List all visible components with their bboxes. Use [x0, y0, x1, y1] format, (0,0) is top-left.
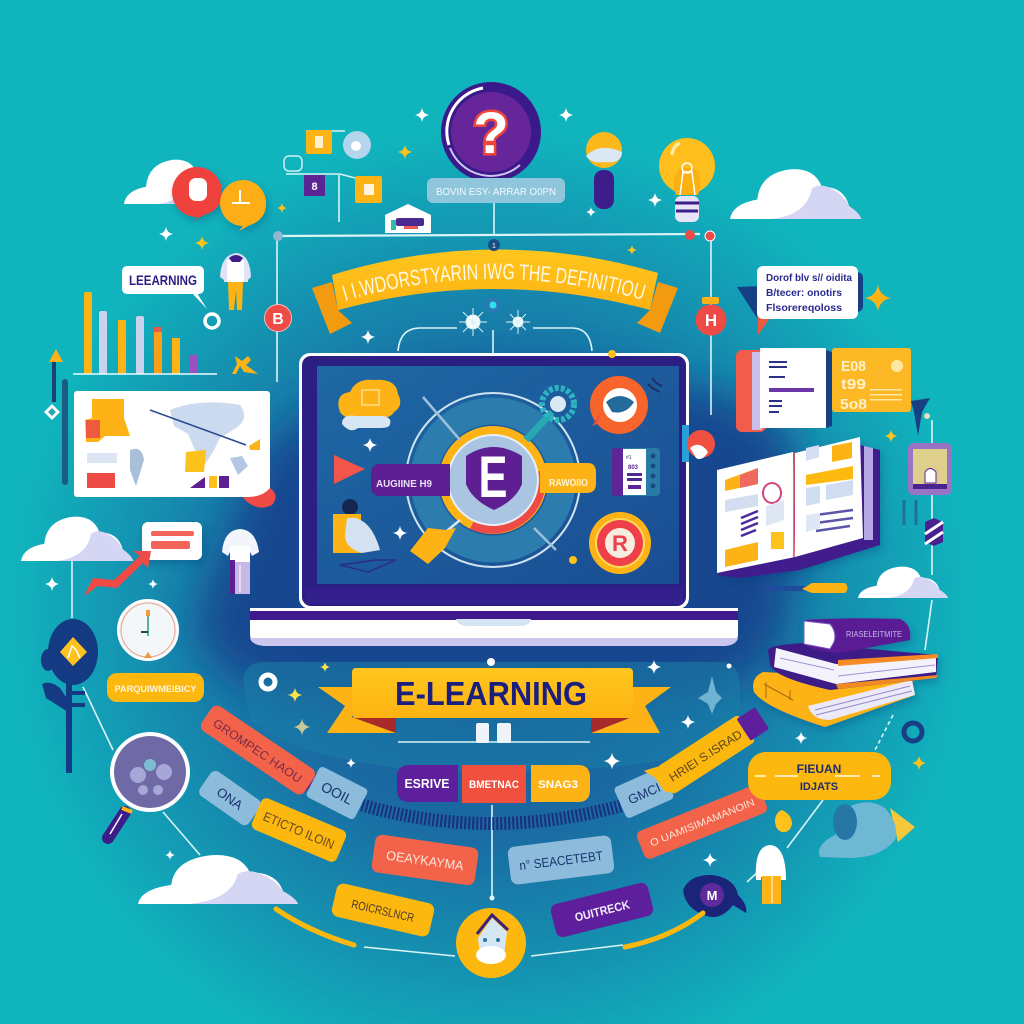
icon: target speech circle [590, 376, 662, 434]
center label group [397, 765, 590, 803]
ribbon: blue OOIL [305, 766, 369, 820]
yellow book [753, 672, 915, 727]
yellow pill: right [748, 752, 891, 800]
ribbon: yellow right: HRIEI S.ISRAD [667, 727, 745, 785]
ribbon: red left: GROMPEC HAOU [210, 716, 304, 786]
dark blue backdrop blob [199, 376, 793, 708]
ribbon: yellow left: ETICTO ILOIN [261, 809, 337, 852]
center label group: BMETNAC [469, 779, 519, 791]
ribbon: red center [371, 834, 479, 886]
ribbon: red left [198, 700, 324, 800]
icon: navy tree [41, 619, 98, 773]
ribbon: blue center: n° SEACETEBT [518, 848, 604, 873]
yellow data card [832, 348, 911, 413]
icon: red growth arrow [84, 551, 151, 596]
ribbon: yellow bottom: ROICRSLNCR [350, 897, 416, 925]
icon: yellow drop [775, 810, 792, 832]
purple top book [804, 618, 910, 653]
node: center line end [490, 896, 494, 900]
purple label [371, 464, 450, 496]
icon: R coin: R [612, 531, 628, 556]
center label group: ESRIVE [404, 777, 450, 791]
decorations: panel icons [261, 658, 732, 735]
small process diagram: 8 [311, 181, 318, 193]
question label: BOVIN ESY- ARRAR O0PN [436, 186, 556, 198]
lower panel backdrop [243, 662, 740, 772]
cloud: left [21, 517, 133, 561]
icon: person at desk [333, 499, 396, 572]
icon: starbursts [459, 308, 530, 336]
left yellow pill: PARQUIWMEIBICY [114, 684, 197, 695]
numbered node [488, 239, 500, 251]
yellow label [540, 463, 596, 493]
yellow data card: E08 [841, 358, 866, 375]
books stack [753, 618, 938, 727]
sparkles [45, 108, 807, 867]
icon: gold star [865, 285, 891, 311]
yellow data card: t99 [841, 376, 866, 393]
yellow arcs [276, 909, 703, 947]
ribbon: blue left: ONA [214, 784, 246, 813]
badge: right red node: H [705, 311, 717, 330]
icon: lamp bulb [586, 132, 622, 209]
icon: person top left [220, 253, 251, 310]
ribbon: purple bottom [549, 881, 655, 939]
icon: navy badge bubble [683, 875, 746, 917]
ribbon: red right [635, 783, 769, 861]
icon: house [385, 204, 431, 233]
icon: card with red lines [142, 522, 202, 560]
screen sparkles [363, 438, 407, 540]
left yellow pill [107, 673, 204, 702]
connector lines [72, 131, 932, 956]
icon: data card [612, 448, 660, 496]
laptop base [250, 608, 738, 646]
yellow pill: right: IDJATS [800, 781, 838, 793]
icon: side tab and red bubble [682, 425, 715, 462]
icon: gallery card [908, 443, 952, 495]
icon: yellow speech bubble [220, 180, 266, 231]
map panel [74, 391, 270, 497]
question label [427, 178, 565, 203]
small process diagram [284, 130, 382, 203]
icon: light bulb [659, 138, 715, 222]
striped arc [362, 805, 624, 824]
yellow data card: 5o8 [840, 396, 867, 413]
purple top book: RIASELEITMITE [846, 630, 902, 639]
node: laptop top connector [486, 298, 500, 312]
numbered node: 1 [492, 243, 496, 250]
ribbon: yellow right [644, 701, 771, 801]
yellow pill: right: FIEUAN [797, 762, 841, 776]
icon: arrow and diamond node [44, 349, 68, 485]
ribbon: blue left [197, 769, 263, 827]
middle book [768, 643, 938, 690]
open book [717, 437, 880, 578]
node: small [924, 413, 930, 419]
navy flag [911, 398, 930, 436]
icon: teal gear [542, 388, 574, 420]
icon: two pills [476, 723, 511, 743]
cloud: top right [730, 169, 861, 219]
icon: navy badge bubble: M [707, 888, 717, 903]
callout: learning: LEEARNING [129, 272, 197, 288]
icon: red speech bubble [172, 167, 222, 221]
central hub: E [478, 445, 508, 510]
ribbon: red right: O UAMISIMAMANOIN [649, 797, 757, 849]
icon: navy ring [904, 723, 922, 741]
ribbon: blue right: GMCI [626, 780, 663, 807]
ribbon: blue right [613, 767, 675, 819]
ribbon: purple bottom: OUITRECK [573, 897, 631, 925]
icon: bottom home badge [456, 908, 526, 978]
cloud: right [858, 567, 948, 598]
gold sparkles [195, 145, 926, 770]
ribbon: yellow bottom [330, 882, 436, 938]
icon: blue glyphs [904, 500, 916, 525]
central hub [406, 393, 580, 567]
badge: left red node: B [272, 311, 284, 328]
purple label: AUGIINE H9 [376, 478, 432, 490]
spokes [423, 397, 556, 550]
speech box: right [737, 266, 863, 335]
nodes: top right [273, 230, 715, 241]
laptop [250, 350, 738, 646]
ribbon: red center: OEAYKAYMA [385, 848, 465, 873]
ribbon: blue center [507, 835, 615, 885]
icon: crossed tools [232, 356, 258, 374]
icon: person left [222, 529, 259, 594]
icon: magnifying glass [108, 732, 190, 838]
speech box: right: Dorof blv s// oidita [766, 272, 852, 284]
top section banner [312, 250, 678, 334]
callout: learning [122, 266, 207, 309]
icon: person right [756, 845, 786, 904]
icon: question mark circle: ? [473, 101, 509, 166]
red corner swoosh [243, 488, 276, 508]
icon: hand pointer [410, 528, 456, 564]
speech box: right: Flsorereqoloss [766, 302, 842, 314]
ribbon: blue OOIL: OOIL [318, 778, 356, 808]
icon: blue blob shape [819, 802, 915, 858]
icon: striped badge [925, 518, 943, 546]
top section banner: I I.WDORSTYARIN IWG THE DEFINITIOU [342, 264, 646, 301]
icon: data card: #1 [626, 455, 632, 461]
closed document book [736, 348, 832, 432]
icon: question mark circle [441, 82, 541, 182]
icon: yellow cloud [338, 380, 400, 430]
laptop frame [299, 353, 689, 609]
icon: data card: 803 [628, 465, 639, 471]
ribbon: yellow left [250, 796, 348, 864]
small node dots [569, 350, 616, 564]
icon: R coin [589, 512, 651, 574]
yellow label: RAWOIIO [549, 477, 588, 489]
icon: callout ring [205, 314, 219, 328]
icon: clock [118, 600, 178, 660]
E-LEARNING ribbon [318, 668, 671, 733]
badge: left red node [264, 304, 292, 332]
icon: play triangle [334, 455, 365, 484]
cloud: bottom left [138, 855, 298, 904]
badge: right red node [696, 297, 726, 336]
speech box: right: B/tecer: onotirs [766, 287, 842, 299]
left chart [73, 292, 217, 374]
E-LEARNING ribbon: E-LEARNING [395, 675, 587, 712]
icon: pen [762, 583, 848, 593]
center label group: SNAG3 [538, 779, 578, 791]
cloud: top left [124, 160, 230, 204]
